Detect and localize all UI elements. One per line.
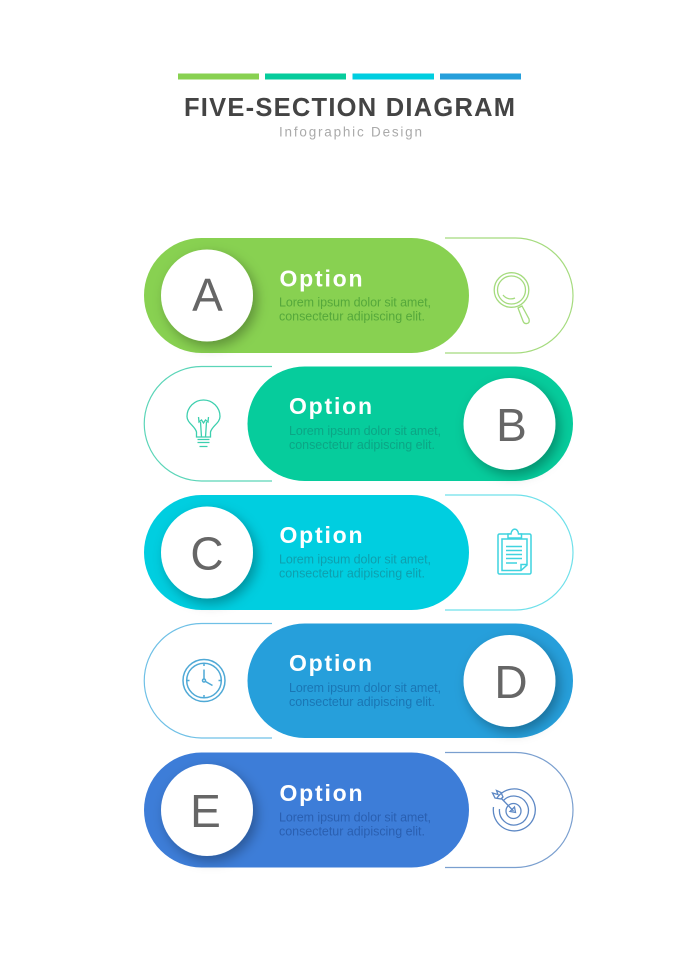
badge D xyxy=(464,635,556,727)
pill C xyxy=(144,495,469,610)
outline tab D xyxy=(144,624,272,738)
badge C: C xyxy=(190,528,224,580)
body text C: consectetur adipiscing elit. xyxy=(279,566,425,580)
panel: option D xyxy=(144,624,573,738)
badge A xyxy=(161,250,253,342)
pill B xyxy=(248,366,573,481)
heading D: Option xyxy=(289,650,372,676)
icon: light bulb xyxy=(187,400,220,446)
body text A: consectetur adipiscing elit. xyxy=(279,310,425,324)
body text E: Lorem ipsum dolor sit amet, xyxy=(279,810,431,824)
icon: clock xyxy=(183,660,225,702)
body text A: Lorem ipsum dolor sit amet, xyxy=(279,296,431,310)
pill A xyxy=(144,238,469,353)
panel: option B xyxy=(144,366,573,481)
badge E xyxy=(161,764,253,856)
title: FIVE-SECTION DIAGRAM xyxy=(184,94,515,122)
body text E: consectetur adipiscing elit. xyxy=(279,824,425,838)
body text B: Lorem ipsum dolor sit amet, xyxy=(289,424,441,438)
body text B: consectetur adipiscing elit. xyxy=(289,438,435,452)
badge D: D xyxy=(494,656,528,708)
outline tab A xyxy=(445,238,573,353)
subtitle: Infographic Design xyxy=(279,124,422,140)
panel: option A xyxy=(144,238,573,353)
icon: clipboard xyxy=(498,529,531,574)
header colour bars xyxy=(178,74,521,80)
badge B: B xyxy=(496,399,527,451)
heading E: Option xyxy=(280,780,362,806)
body text D: consectetur adipiscing elit. xyxy=(289,695,435,709)
panel: option C xyxy=(144,495,573,610)
pill D xyxy=(248,624,573,738)
heading B: Option xyxy=(289,393,372,419)
heading C: Option xyxy=(280,522,362,548)
outline tab E xyxy=(445,752,573,868)
badge A: A xyxy=(192,269,223,321)
badge C xyxy=(161,506,253,598)
heading A: Option xyxy=(280,266,362,292)
panel: option E xyxy=(144,752,573,868)
body text C: Lorem ipsum dolor sit amet, xyxy=(279,552,431,566)
badge E: E xyxy=(190,785,221,837)
icon: magnifying glass xyxy=(494,273,529,324)
outline tab C xyxy=(445,495,573,610)
badge B xyxy=(464,378,556,470)
icon: target with arrow xyxy=(492,789,535,831)
body text D: Lorem ipsum dolor sit amet, xyxy=(289,681,441,695)
pill E xyxy=(144,752,469,868)
outline tab B xyxy=(144,366,272,481)
